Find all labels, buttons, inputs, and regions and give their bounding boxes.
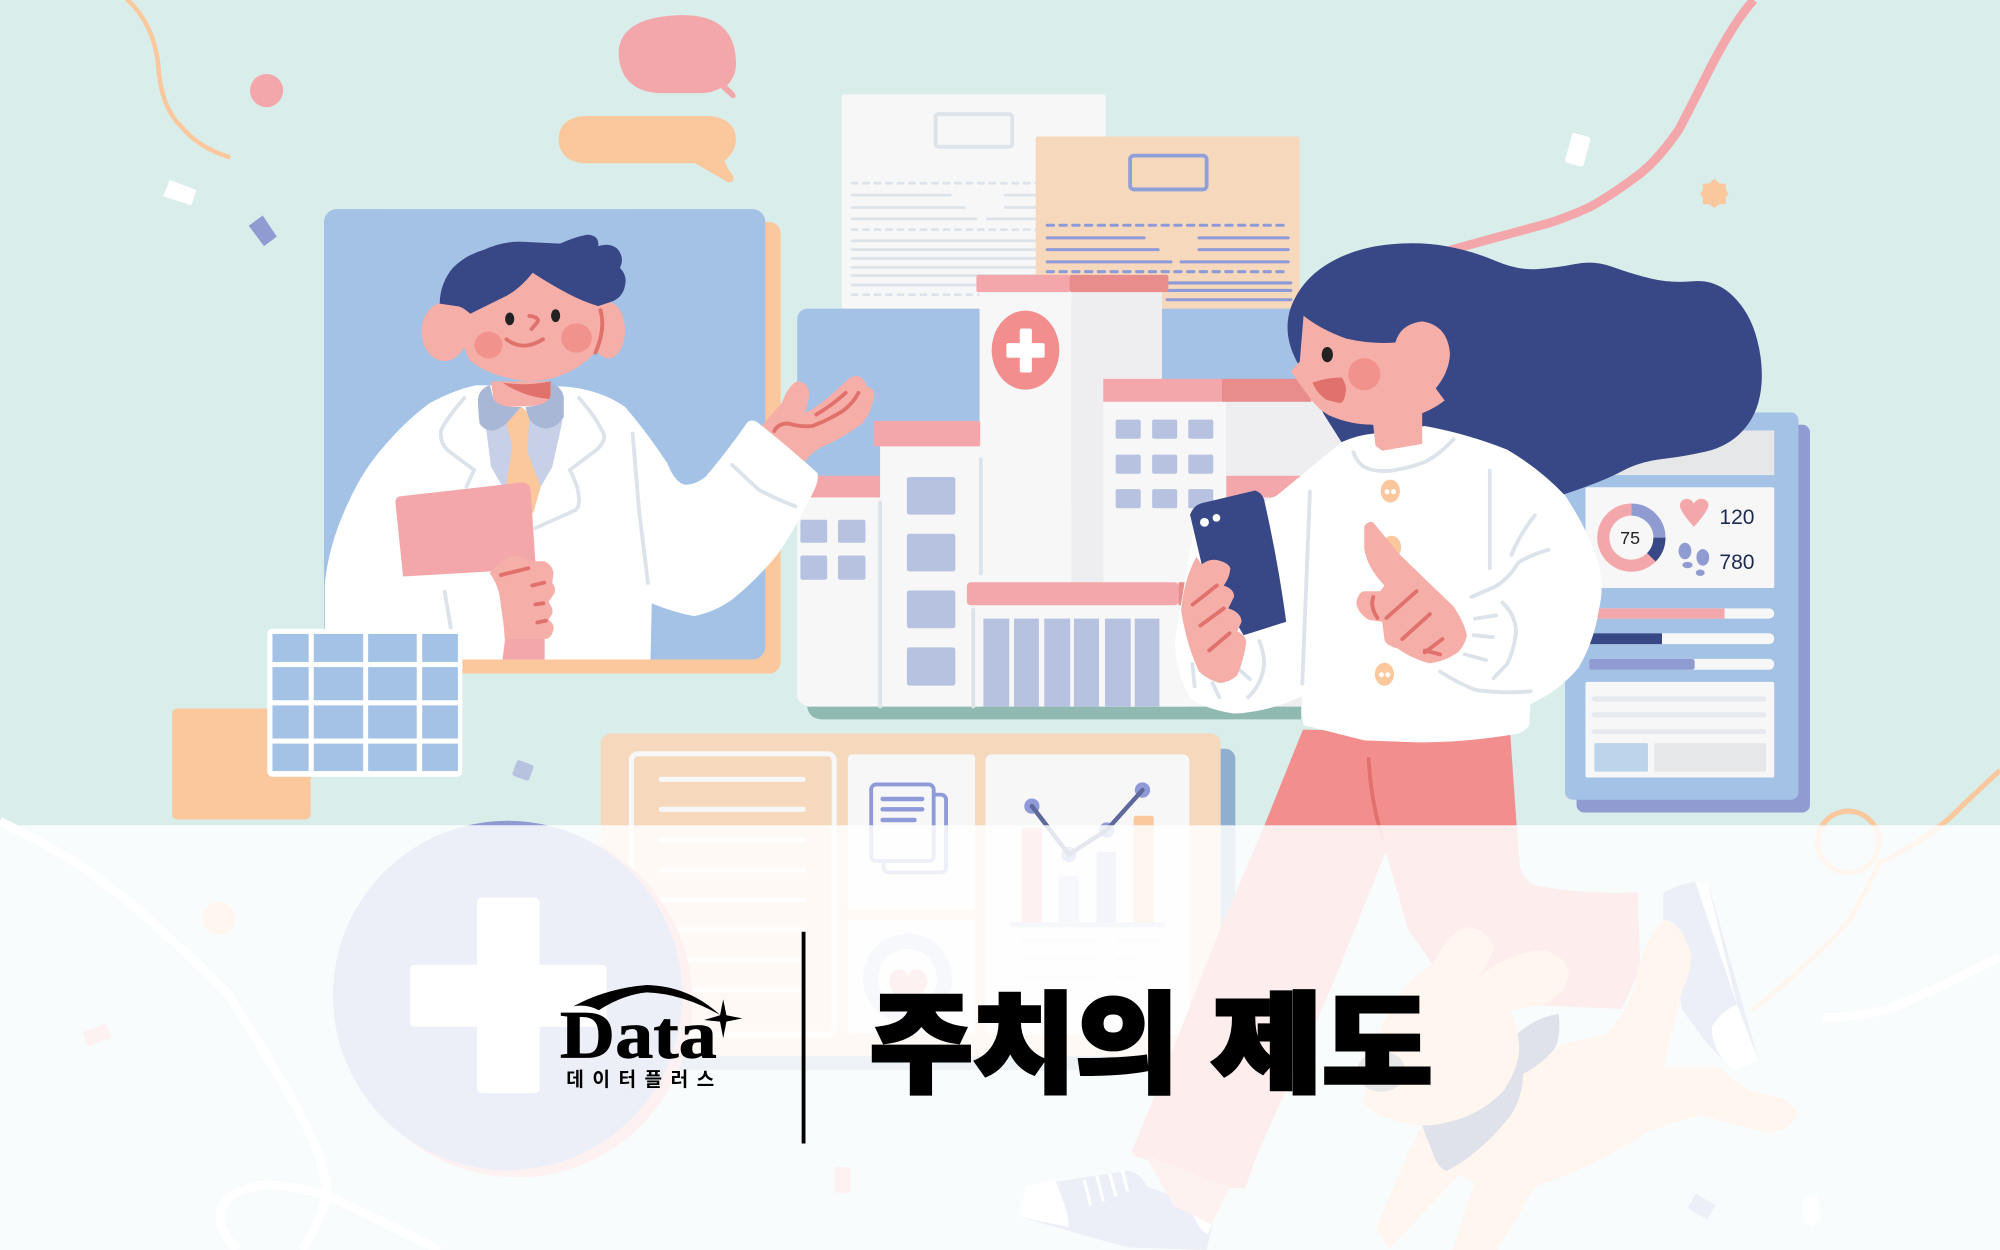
translucent white veil over lower area xyxy=(0,825,2000,1250)
pink decorative curve top right xyxy=(1441,0,1754,253)
doctor white coat xyxy=(325,385,818,659)
woman sweater xyxy=(1175,426,1602,742)
logo Korean name: 데이터플러스 xyxy=(566,1069,714,1091)
hospital left wing xyxy=(797,476,880,707)
woman trousers xyxy=(1132,730,1640,1188)
woman hand holding phone xyxy=(1181,557,1246,683)
woman lower skin far shape xyxy=(1376,920,1797,1250)
woman lower skin near shape xyxy=(1364,927,1569,1125)
woman buttons xyxy=(1375,480,1401,686)
hospital back blue panel xyxy=(797,309,1307,500)
hospital tower with cross sign xyxy=(976,275,1168,597)
hospital building xyxy=(797,275,1341,719)
health tablet xyxy=(1565,412,1810,812)
hospital right wing xyxy=(1103,379,1341,707)
woman character xyxy=(1019,243,1797,1250)
confetti shapes xyxy=(163,74,1728,781)
dashboard chart card xyxy=(985,754,1189,1034)
doctor raised hand xyxy=(761,376,874,462)
dashboard text card xyxy=(631,754,834,1034)
woman pointing hand xyxy=(1356,522,1467,663)
woman rear shoe xyxy=(1663,881,1759,1070)
title: 주치의 xyxy=(870,985,1179,1106)
video call panel blue xyxy=(324,209,765,659)
white document xyxy=(842,94,1106,310)
woman sweater seams xyxy=(1192,439,1548,697)
doctor clipboard xyxy=(395,483,535,577)
logo wordmark: Data xyxy=(560,997,717,1072)
hospital entrance block xyxy=(967,582,1189,707)
doctor coat seams xyxy=(441,398,796,630)
woman navy skirt shadow xyxy=(1421,1014,1559,1171)
doctor face details xyxy=(474,309,602,358)
large medical circle with cross xyxy=(333,821,693,1177)
logo: Data Plus xyxy=(560,985,742,1091)
doctor character xyxy=(325,235,874,659)
orange decorative curve top left xyxy=(128,0,228,157)
doctor neck xyxy=(491,381,551,407)
doctor hair xyxy=(440,235,626,314)
speech bubble pink xyxy=(619,15,736,98)
lower confetti xyxy=(82,902,1716,1220)
dashboard board xyxy=(601,733,1221,1056)
woman face xyxy=(1291,316,1450,451)
tablet metrics card: 75 xyxy=(1620,528,1640,548)
doctor shirt xyxy=(486,411,562,487)
woman phone xyxy=(1190,491,1286,635)
woman front shoe xyxy=(1019,1171,1213,1250)
hospital middle wing xyxy=(874,421,980,707)
title: 제도 xyxy=(1212,985,1432,1106)
doctor holding hand xyxy=(490,555,555,659)
video call panel back xyxy=(383,222,781,673)
tablet metrics card: 120 xyxy=(1719,506,1754,529)
tablet metrics card: 780 xyxy=(1719,551,1754,574)
logo star xyxy=(704,999,742,1038)
divider xyxy=(802,932,805,1143)
tablet progress bars xyxy=(1589,608,1774,670)
tablet metrics card xyxy=(1585,487,1774,588)
doctor ears and face xyxy=(422,273,625,381)
doctor collar xyxy=(478,383,564,431)
speech bubble orange xyxy=(559,116,736,182)
dashboard board back xyxy=(612,749,1235,1070)
dashboard document card xyxy=(848,754,975,910)
logo swoosh xyxy=(573,985,720,1015)
doctor necktie xyxy=(506,407,541,513)
orange square xyxy=(172,709,311,820)
orange document xyxy=(1036,136,1300,310)
dashboard heart gauge card xyxy=(848,920,975,1033)
bottom area decorative curves xyxy=(1753,770,2000,1010)
hospital base shadow xyxy=(807,702,1301,719)
white sweeping curves xyxy=(0,821,2000,1250)
tablet lower card xyxy=(1585,682,1774,778)
title xyxy=(870,985,1432,1106)
calendar grid xyxy=(267,629,462,777)
woman ankles xyxy=(1144,1154,1230,1224)
woman hair xyxy=(1288,243,1762,510)
